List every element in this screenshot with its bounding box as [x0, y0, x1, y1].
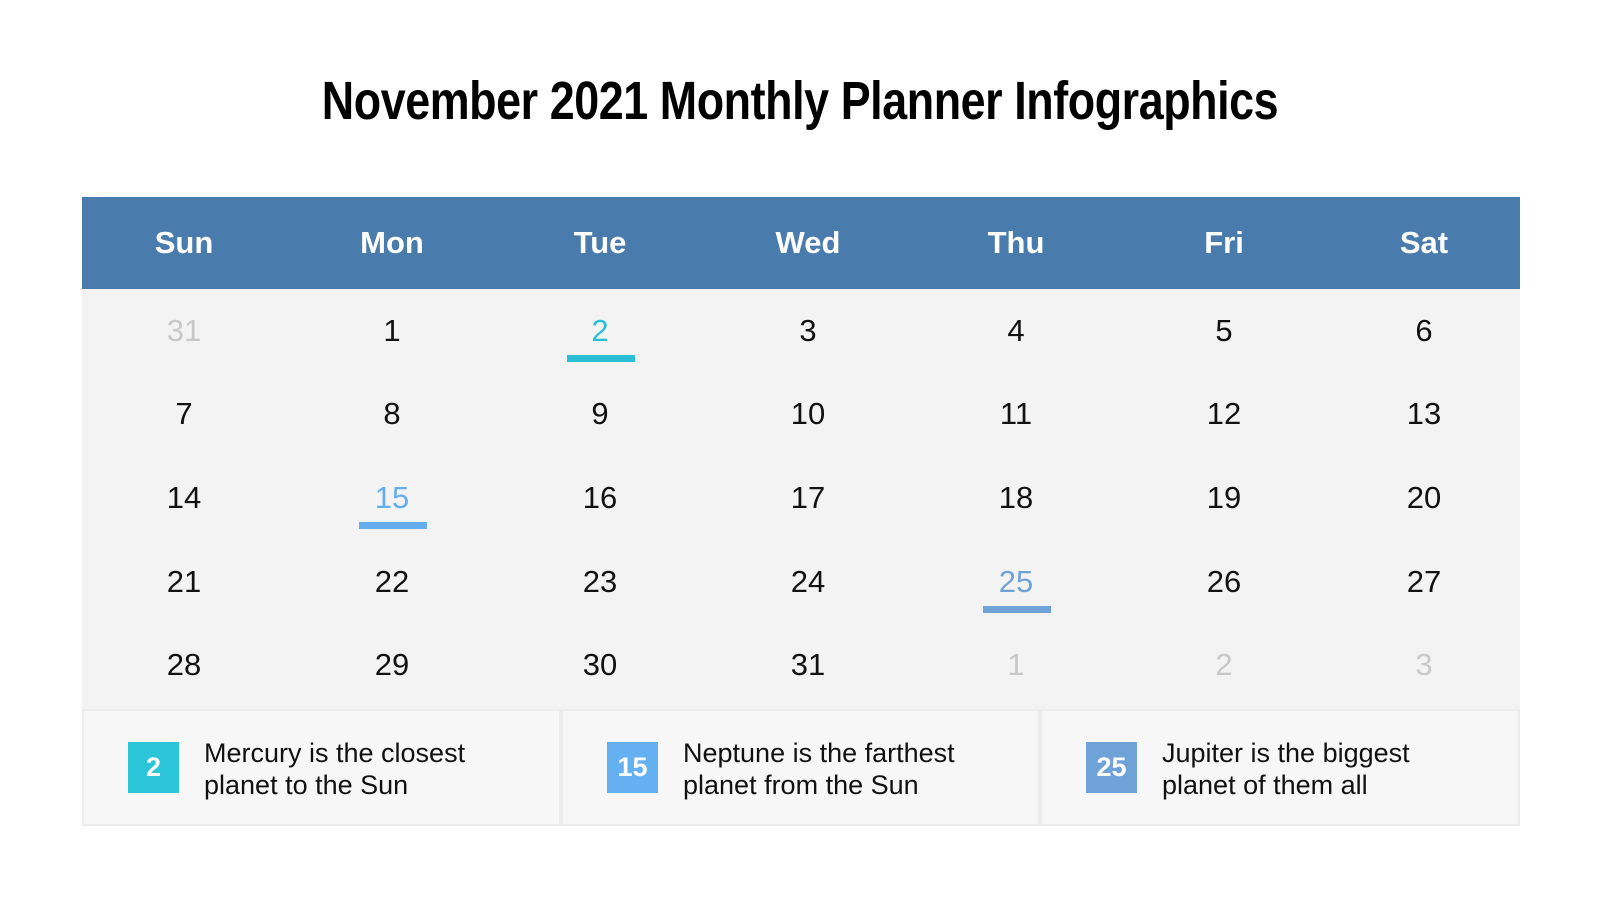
calendar grid: 1	[383, 313, 401, 348]
underline: 15	[359, 522, 427, 529]
calendar grid: 20	[1407, 480, 1441, 515]
calendar grid: 2	[1215, 647, 1233, 682]
header: weekdays: Fri	[1204, 225, 1244, 260]
calendar grid: 23	[583, 564, 617, 599]
text: planet from the Sun	[683, 770, 919, 800]
text: Neptune is the farthest	[683, 738, 955, 768]
calendar grid: 31	[167, 313, 201, 348]
calendar grid: 24	[791, 564, 825, 599]
header: weekdays	[82, 197, 1520, 289]
text: planet of them all	[1162, 770, 1368, 800]
badge 25: 25	[1096, 752, 1127, 782]
calendar grid: 30	[583, 647, 617, 682]
calendar grid: 5	[1215, 313, 1233, 348]
calendar grid: 26	[1207, 564, 1241, 599]
header: weekdays: Mon	[360, 225, 424, 260]
header: weekdays: Wed	[776, 225, 840, 260]
header: weekdays: Tue	[574, 225, 626, 260]
calendar grid: 17	[791, 480, 825, 515]
badge 15: 15	[617, 752, 648, 782]
calendar grid: 6	[1415, 313, 1433, 348]
calendar grid: 4	[1007, 313, 1025, 348]
badge 15	[607, 742, 658, 793]
calendar grid: 10	[791, 396, 825, 431]
calendar grid: 3	[799, 313, 817, 348]
calendar grid: 3	[1415, 647, 1433, 682]
calendar grid: 19	[1207, 480, 1241, 515]
calendar grid: 29	[375, 647, 409, 682]
text: Jupiter is the biggest	[1162, 738, 1410, 768]
header: weekdays: Thu	[988, 225, 1044, 260]
text	[1162, 738, 1410, 800]
badge 2	[128, 742, 179, 793]
header: weekdays: Sat	[1400, 225, 1448, 260]
calendar grid: 11	[1000, 396, 1032, 431]
calendar grid: 15	[375, 480, 409, 515]
calendar grid: 2	[591, 313, 609, 348]
calendar grid: 25	[999, 564, 1033, 599]
legend: 2	[82, 709, 561, 826]
calendar grid: 31	[791, 647, 825, 682]
calendar grid: 28	[167, 647, 201, 682]
underline: 2	[567, 355, 635, 362]
calendar grid: 27	[1407, 564, 1441, 599]
text: planet to the Sun	[204, 770, 408, 800]
badge 25	[1086, 742, 1137, 793]
text	[204, 738, 465, 800]
calendar grid	[82, 289, 1520, 709]
header: weekdays: Sun	[155, 225, 213, 260]
badge 2: 2	[146, 752, 161, 782]
legend: 15	[561, 709, 1040, 826]
calendar grid: 16	[583, 480, 617, 515]
calendar grid: 7	[175, 396, 193, 431]
text: Mercury is the closest	[204, 738, 465, 768]
calendar grid: 14	[167, 480, 201, 515]
calendar grid: 13	[1407, 396, 1441, 431]
legend: 25	[1040, 709, 1520, 826]
text	[683, 738, 955, 800]
calendar grid: 18	[999, 480, 1033, 515]
title: November 2021 Monthly Planner Infographics	[322, 71, 1278, 131]
calendar grid: 22	[375, 564, 409, 599]
calendar grid: 1	[1007, 647, 1025, 682]
underline: 25	[983, 606, 1051, 613]
calendar grid: 21	[167, 564, 201, 599]
calendar grid: 12	[1207, 396, 1241, 431]
calendar grid: 8	[383, 396, 401, 431]
calendar grid: 9	[591, 396, 609, 431]
